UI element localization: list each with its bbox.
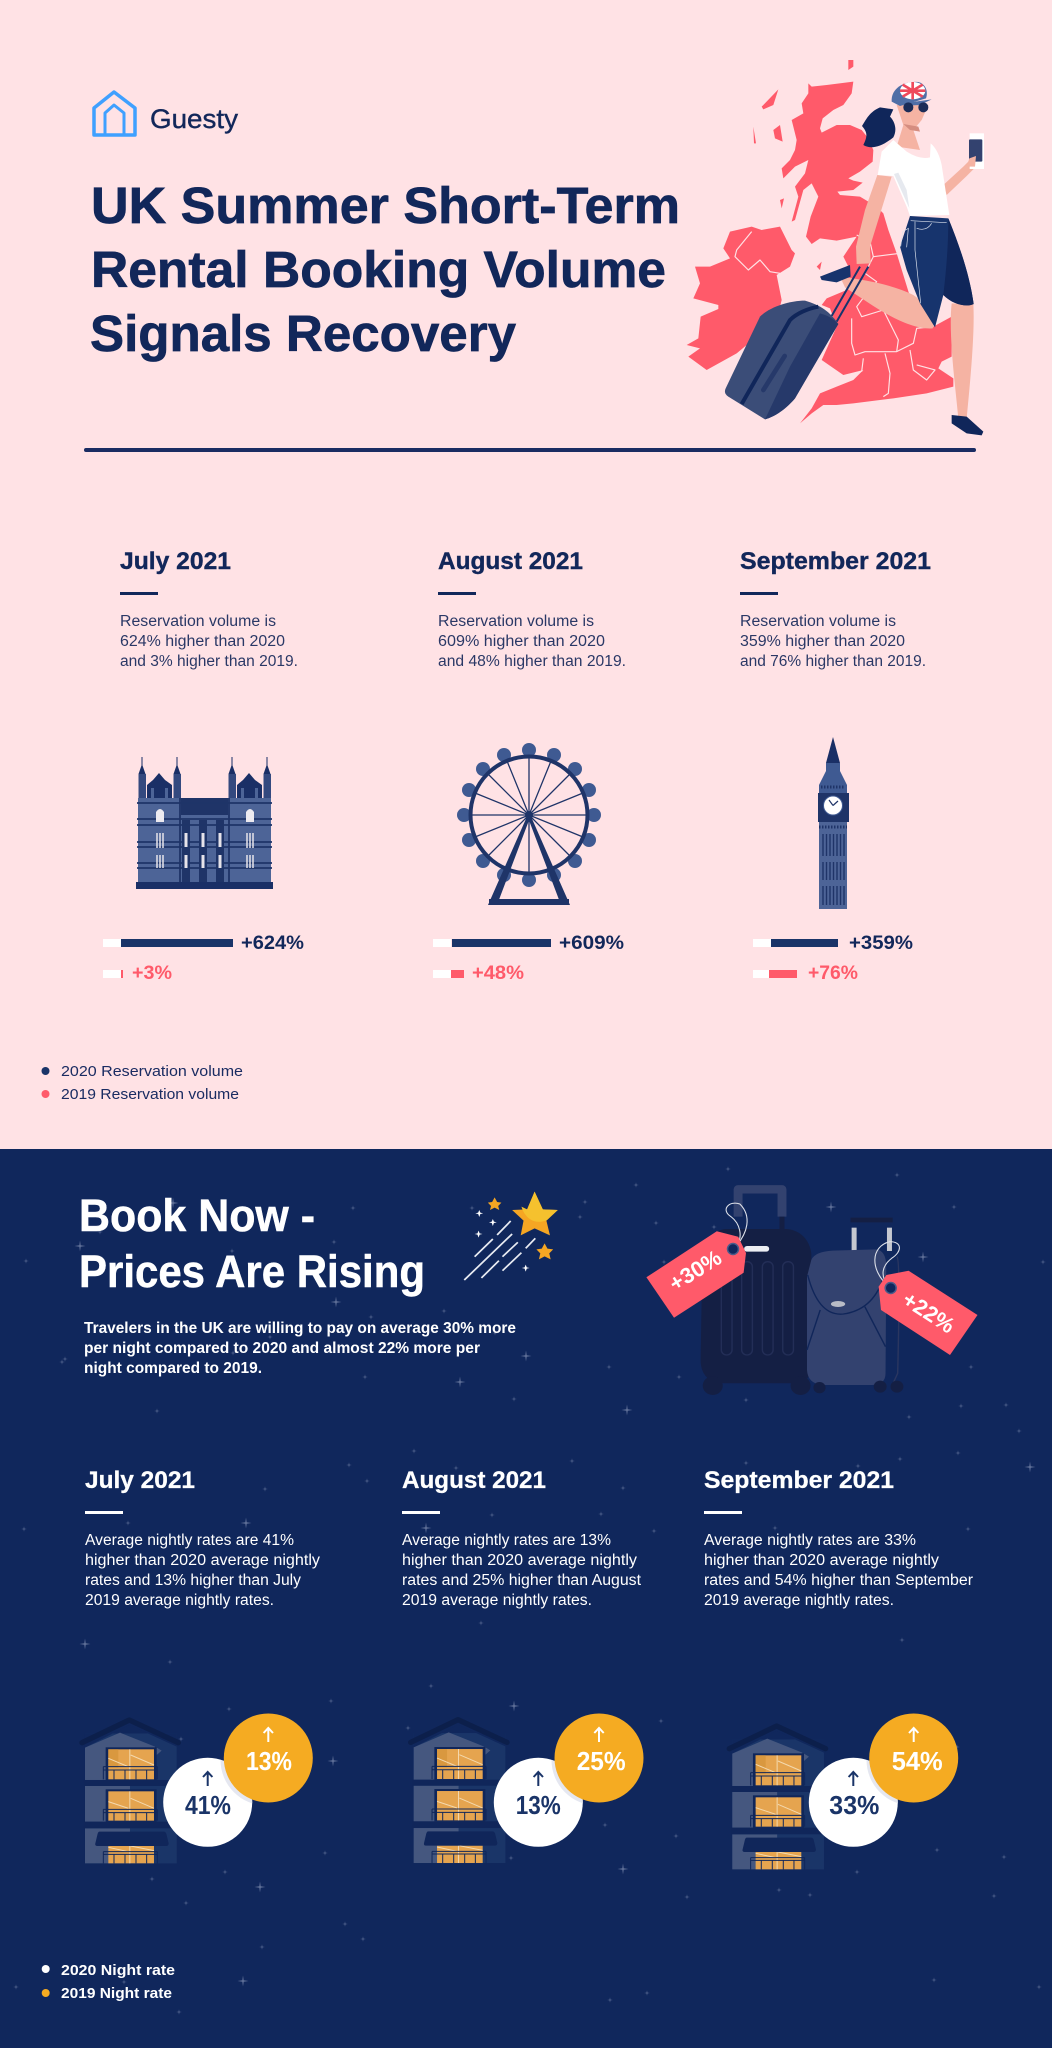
title: Signals Recovery <box>90 305 517 362</box>
legend: night rate <box>42 1962 175 2002</box>
house with rate badges: August <box>411 1714 644 1863</box>
panel: summer booking volume <box>0 0 1052 1149</box>
icon: London Eye <box>457 743 601 905</box>
column: July 2021 rate text: 2019 average nightly rates. <box>85 1592 274 1609</box>
column: September 2021 volume text: Reservation volume is <box>740 613 896 630</box>
price tag: +22%: +22% <box>898 1286 959 1338</box>
bar chart: July: +624% <box>241 933 304 954</box>
house with rate badges: July <box>82 1714 313 1863</box>
intro text: Travelers in the UK are willing to pay on average 30% more <box>84 1320 516 1337</box>
legend: reservation volume: 2019 Reservation volume <box>61 1086 239 1103</box>
title: Rental Booking Volume <box>91 241 666 298</box>
house with rate badges: September: 33% <box>829 1790 879 1820</box>
intro text: per night compared to 2020 and almost 22% more per <box>84 1340 480 1357</box>
hero illustration: UK map and traveler <box>687 60 984 435</box>
logo: Guesty <box>94 92 239 135</box>
column: July 2021 volume text: July 2021 <box>120 548 231 575</box>
heading: Book Now - Prices Are Rising <box>79 1190 425 1297</box>
column: August 2021 rate text: Average nightly rates are 13% <box>402 1532 611 1549</box>
bar chart: August: +48% <box>472 963 524 984</box>
icon: shooting star <box>464 1192 558 1280</box>
column: July 2021 volume text: Reservation volume is <box>120 613 276 630</box>
column: August 2021 volume text <box>438 548 626 670</box>
column: August 2021 volume text: 609% higher than 2020 <box>438 633 605 650</box>
icon: Big Ben <box>818 737 849 909</box>
bar chart: August: +609% <box>559 933 624 954</box>
house with rate badges: August: 13% <box>516 1790 561 1820</box>
house with rate badges: September: 54% <box>892 1746 943 1776</box>
column: August 2021 volume text: August 2021 <box>438 548 583 575</box>
column: July 2021 volume text <box>120 548 298 670</box>
title <box>90 177 680 362</box>
column: September 2021 volume text: 359% higher than 2020 <box>740 633 905 650</box>
column: August 2021 rate text <box>402 1467 642 1609</box>
heading: Book Now - Prices Are Rising: Prices Are Rising <box>79 1246 425 1297</box>
column: August 2021 rate text: rates and 25% higher than August <box>402 1572 642 1589</box>
column: September 2021 volume text <box>740 548 931 670</box>
column: September 2021 volume text: and 76% higher than 2019. <box>740 653 926 670</box>
illustration: luggage <box>701 1189 903 1395</box>
column: July 2021 rate text: July 2021 <box>85 1467 195 1494</box>
column: July 2021 volume text: and 3% higher than 2019. <box>120 653 298 670</box>
column: September 2021 rate text <box>704 1467 973 1609</box>
column: August 2021 rate text: August 2021 <box>402 1467 546 1494</box>
legend: reservation volume: 2020 Reservation volume <box>61 1063 243 1080</box>
bar chart: September <box>753 933 913 984</box>
house with rate badges: July: 13% <box>246 1746 292 1776</box>
legend: night rate: 2019 Night rate <box>61 1985 172 2002</box>
column: August 2021 rate text: 2019 average nightly rates. <box>402 1592 592 1609</box>
heading: Book Now - Prices Are Rising: Book Now - <box>79 1190 315 1241</box>
column: August 2021 rate text: higher than 2020 average nightly <box>402 1552 637 1569</box>
column: September 2021 volume text: September 2021 <box>740 548 931 575</box>
column: July 2021 rate text: Average nightly rates are 41% <box>85 1532 294 1549</box>
column: September 2021 rate text: September 2021 <box>704 1467 894 1494</box>
column: July 2021 rate text: higher than 2020 average nightly <box>85 1552 320 1569</box>
icon: Westminster palace <box>136 757 273 889</box>
price tag: +22% <box>879 1271 978 1355</box>
price tag: +30% <box>646 1231 746 1318</box>
map of the UK and Ireland <box>687 60 953 423</box>
house with rate badges: July: 41% <box>185 1790 231 1820</box>
bar chart: September: +359% <box>849 933 913 954</box>
divider line <box>84 448 976 452</box>
traveler woman <box>820 82 984 435</box>
column: July 2021 rate text: rates and 13% higher than July <box>85 1572 301 1589</box>
house with rate badges: August: 25% <box>577 1746 626 1776</box>
house with rate badges: September <box>729 1714 958 1869</box>
price tag: +30%: +30% <box>665 1245 726 1296</box>
panel: prices are rising <box>0 1149 1052 2048</box>
intro text <box>84 1320 516 1377</box>
legend: night rate: 2020 Night rate <box>61 1962 175 1979</box>
column: July 2021 volume text: 624% higher than 2020 <box>120 633 285 650</box>
legend: reservation volume <box>42 1063 243 1103</box>
column: September 2021 rate text: Average nightly rates are 33% <box>704 1532 916 1549</box>
title: UK Summer Short-Term <box>91 177 680 234</box>
logo: Guesty: Guesty <box>150 104 239 134</box>
bar chart: July <box>103 933 304 984</box>
bar chart: July: +3% <box>132 963 172 984</box>
intro text: night compared to 2019. <box>84 1360 262 1377</box>
column: September 2021 rate text: higher than 2020 average nightly <box>704 1552 939 1569</box>
column: September 2021 rate text: rates and 54% higher than September <box>704 1572 973 1589</box>
suitcase <box>725 267 868 419</box>
column: September 2021 rate text: 2019 average nightly rates. <box>704 1592 894 1609</box>
column: July 2021 rate text <box>85 1467 320 1609</box>
bar chart: August <box>433 933 624 984</box>
bar chart: September: +76% <box>808 963 858 984</box>
column: August 2021 volume text: and 48% higher than 2019. <box>438 653 626 670</box>
column: August 2021 volume text: Reservation volume is <box>438 613 594 630</box>
